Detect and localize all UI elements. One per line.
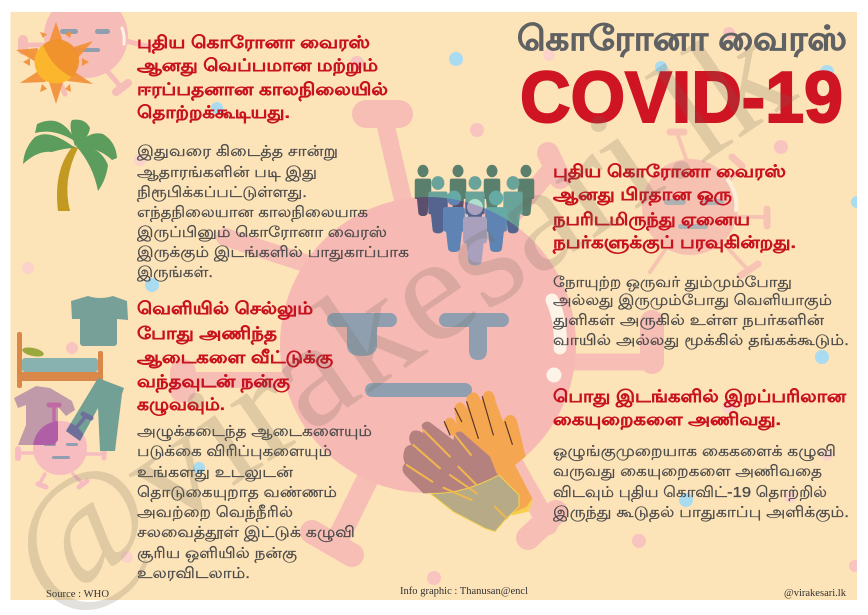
text block: droplets: அல்லது இருமும்போது வெளியாகும் — [553, 292, 832, 310]
footer: credit: Info graphic : Thanusan@encl — [400, 586, 528, 597]
small virus right — [642, 132, 767, 276]
text block: hand washing: ஒழுங்குமுறையாக கைகளைக் கழுவி — [553, 443, 836, 461]
text block: evidence: இருக்கும் இடங்களில் பாதுகாப்பாக — [137, 244, 409, 262]
heading: person to person: புதிய கொரோனா வைரஸ் — [553, 162, 786, 182]
heading: heat and humidity: தொற்றக்கூடியது. — [137, 103, 290, 123]
text block: droplets: வாயில் அல்லது மூக்கில் தங்கக்கூடும். — [553, 332, 849, 349]
text block: evidence: இருப்பினும் கொரோனா வைரஸ் — [137, 224, 387, 241]
text block: droplets: நோயுற்ற ஒருவர் தும்மும்போது — [553, 274, 792, 291]
heading: gloves — [553, 387, 847, 430]
heading: gloves: பொது இடங்களில் இறப்பரிலான — [553, 387, 847, 407]
heading: person to person: நபரிடமிருந்து ஏனைய — [552, 210, 750, 230]
small virus bottom left — [18, 421, 104, 487]
text block: hand washing — [553, 443, 849, 522]
heading: heat and humidity: ஈரப்பதனான காலநிலையில் — [137, 80, 388, 102]
big virus — [183, 114, 652, 555]
title: COVID-19: COVID-19 — [520, 58, 843, 138]
text block: evidence: இருங்கள். — [137, 264, 213, 281]
icon: group of people — [415, 165, 534, 265]
footer: source: Source : WHO — [46, 589, 109, 600]
heading: clothes: வெளியில் செல்லும் — [137, 299, 313, 319]
text block: droplets: துளிகள் அருகில் உள்ள நபர்களின் — [553, 312, 825, 329]
footer: handle: @virakesari.lk — [784, 588, 846, 599]
heading: clothes — [137, 299, 333, 416]
icon: gloves — [402, 391, 533, 532]
text block: washing clothes: சலவைத்தூள் இட்டுக் கழுவி — [137, 524, 355, 542]
icon: bed — [17, 332, 103, 388]
heading: heat and humidity — [137, 33, 388, 123]
icon: t-shirt — [71, 296, 128, 346]
text block: hand washing: வருவது கையுறைகளை அணிவதை — [553, 463, 822, 480]
text block: washing clothes: உலரவிடலாம். — [137, 565, 250, 582]
text block: evidence: எந்தநிலையான காலநிலையாக — [137, 204, 368, 221]
text block: washing clothes — [137, 423, 372, 582]
text block: hand washing: விடவும் புதிய கொவிட்-19 தொற்றில் — [553, 484, 827, 501]
heading: heat and humidity: புதிய கொரோனா வைரஸ் — [137, 33, 370, 53]
icon: sun — [16, 22, 93, 104]
text block: washing clothes: அழுக்கடைந்த ஆடைகளையும் — [137, 423, 372, 441]
icon: shirt — [14, 386, 75, 445]
text block: evidence: ஆதாரங்களின் படி இது — [137, 164, 317, 181]
heading: clothes: வந்தவுடன் நன்கு — [137, 372, 290, 392]
heading: clothes: கழுவவும். — [137, 395, 225, 416]
text block: hand washing: இருந்து கூடுதல் பாதுகாப்பு அளிக்கும். — [553, 504, 849, 522]
text block: evidence — [137, 143, 409, 281]
text block: washing clothes: உங்களது உடலுடன் — [137, 464, 294, 482]
text block: evidence: இதுவரை கிடைத்த சான்று — [137, 143, 338, 160]
text block: washing clothes: தொடுகையுறாத வண்ணம் — [137, 484, 337, 501]
title: Tamil: கொரோனா வைரஸ் — [517, 20, 847, 58]
text block: washing clothes: சூரிய ஒளியில் நன்கு — [137, 545, 297, 563]
icon: trousers — [66, 378, 124, 451]
heading: clothes: ஆடைகளை வீட்டுக்கு — [137, 348, 333, 368]
heading: person to person: நபர்களுக்குப் பரவுகின்றது. — [552, 233, 796, 254]
small virus top left — [23, 0, 150, 94]
heading: person to person — [552, 162, 796, 254]
heading: clothes: போது அணிந்த — [137, 324, 277, 344]
face — [327, 313, 509, 397]
heading: heat and humidity: ஆனது வெப்பமான மற்றும் — [137, 56, 378, 76]
text block: droplets — [553, 274, 849, 349]
icon: palm tree — [23, 120, 117, 211]
heading: gloves: கையுறைகளை அணிவது. — [553, 410, 781, 430]
text block: washing clothes: அவற்றை வெந்நீரில் — [137, 504, 293, 521]
dots — [145, 52, 863, 507]
text block: evidence: நிரூபிக்கப்பட்டுள்ளது. — [137, 184, 307, 201]
text block: washing clothes: படுக்கை விரிப்புகளையும் — [137, 443, 332, 460]
heading: person to person: ஆனது பிரதான ஒரு — [553, 185, 732, 205]
